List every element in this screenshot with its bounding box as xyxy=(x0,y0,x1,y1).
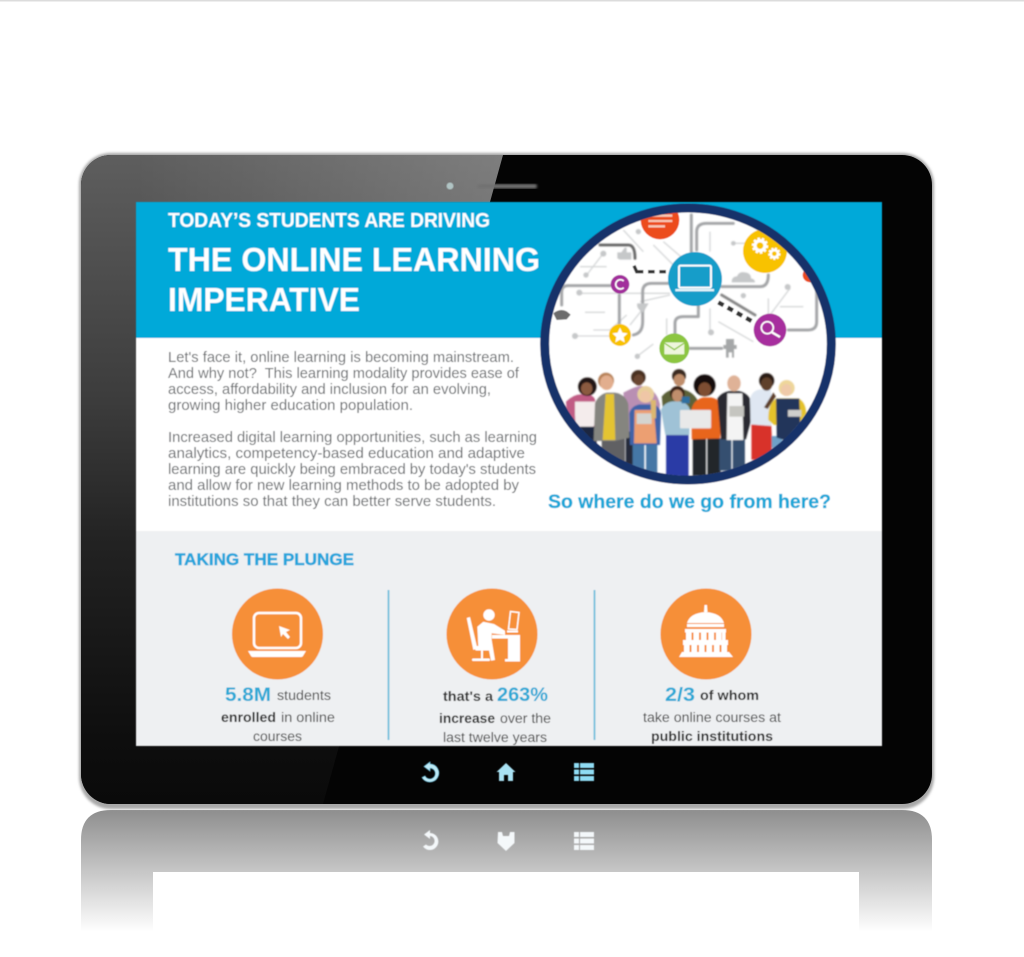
camera xyxy=(446,182,454,190)
stat: 5.8M students: courses xyxy=(253,729,302,744)
back row men xyxy=(623,386,660,434)
stat: 263% increase: last twelve years xyxy=(443,730,547,745)
stat: 5.8M students: 5.8M xyxy=(225,685,271,706)
man in gray jacket xyxy=(602,438,625,463)
laptop held xyxy=(680,410,711,428)
icon: menu list xyxy=(574,763,594,781)
intro text xyxy=(168,350,537,510)
icon: star xyxy=(609,324,631,346)
blonde woman in yellow and navy xyxy=(772,436,782,448)
man in red pants xyxy=(751,424,772,460)
intro text: Let's face it, online learning is becoming mainstream. xyxy=(168,350,514,366)
stat: 263% increase: over the xyxy=(500,711,551,726)
divider left xyxy=(388,590,390,740)
stat: 2/3 public xyxy=(643,588,781,744)
intro text: institutions so that they can better serve students. xyxy=(168,494,496,510)
title xyxy=(168,210,540,318)
stat: 5.8M students: students xyxy=(277,688,331,703)
stat: 263% increase xyxy=(439,588,551,745)
tablet body xyxy=(79,153,934,809)
bald man in blazer xyxy=(719,438,731,471)
icon: copyright badge xyxy=(611,275,629,294)
intro text: learning are quickly being embraced by today's students xyxy=(168,462,536,478)
title: IMPERATIVE xyxy=(168,281,360,318)
icon: red chat xyxy=(640,212,680,240)
woman in denim jacket xyxy=(666,435,689,477)
icon: person at desk xyxy=(446,588,538,680)
man in orange sweater xyxy=(693,438,706,476)
stat: 263% increase: 263% xyxy=(497,685,548,706)
stat: 5.8M students xyxy=(221,588,335,744)
reflected navigation icons xyxy=(423,830,594,851)
intro text: growing higher education population. xyxy=(168,398,413,414)
intro text: And why not? This learning modality provides ease of xyxy=(168,366,520,382)
intro text: Increased digital learning opportunities, such as learning xyxy=(168,430,537,446)
intro text: access, affordability and inclusion for an evolving, xyxy=(168,382,491,398)
icon: mail xyxy=(659,333,689,363)
title: TODAY’S STUDENTS ARE DRIVING xyxy=(168,210,490,232)
people group xyxy=(566,369,806,477)
stat: 263% increase: that's a xyxy=(443,689,494,704)
stat: 263% increase: increase xyxy=(439,711,495,726)
circuit lines xyxy=(575,230,803,357)
header band xyxy=(136,202,882,338)
icon: laptop with cursor xyxy=(232,588,323,680)
stat: 2/3 public: of whom xyxy=(700,688,759,703)
intro text: and allow for new learning methods to be adopted by xyxy=(168,478,520,494)
woman in pink and white xyxy=(564,393,596,428)
icon: home xyxy=(496,763,516,781)
icon: back arrow xyxy=(422,762,439,782)
stats band xyxy=(136,531,882,746)
stat: 5.8M students: in online xyxy=(281,710,335,725)
icon: orange partial xyxy=(802,270,812,283)
icon: gears xyxy=(743,229,787,273)
stat: 2/3 public: take online courses at xyxy=(643,710,781,725)
tablet reflection xyxy=(81,810,932,934)
question callout: So where do we go from here? xyxy=(548,491,831,513)
stat: 5.8M students: enrolled xyxy=(221,710,276,725)
navigation buttons xyxy=(422,762,594,782)
blonde woman in blue cardigan xyxy=(633,443,644,473)
screen glare xyxy=(81,155,503,804)
icon: capitol building xyxy=(660,588,752,680)
circular illustration xyxy=(545,201,831,480)
stat: 2/3 public: public institutions xyxy=(651,729,773,744)
icon: search xyxy=(754,314,786,346)
intro text: analytics, competency-based education and adaptive xyxy=(168,446,525,462)
divider right xyxy=(594,590,596,740)
section heading: TAKING THE PLUNGE xyxy=(175,550,354,569)
speaker xyxy=(477,184,537,188)
stat: 2/3 public: 2/3 xyxy=(665,685,695,706)
title: THE ONLINE LEARNING xyxy=(168,241,540,278)
screen xyxy=(136,201,882,746)
icon: laptop xyxy=(668,252,722,306)
